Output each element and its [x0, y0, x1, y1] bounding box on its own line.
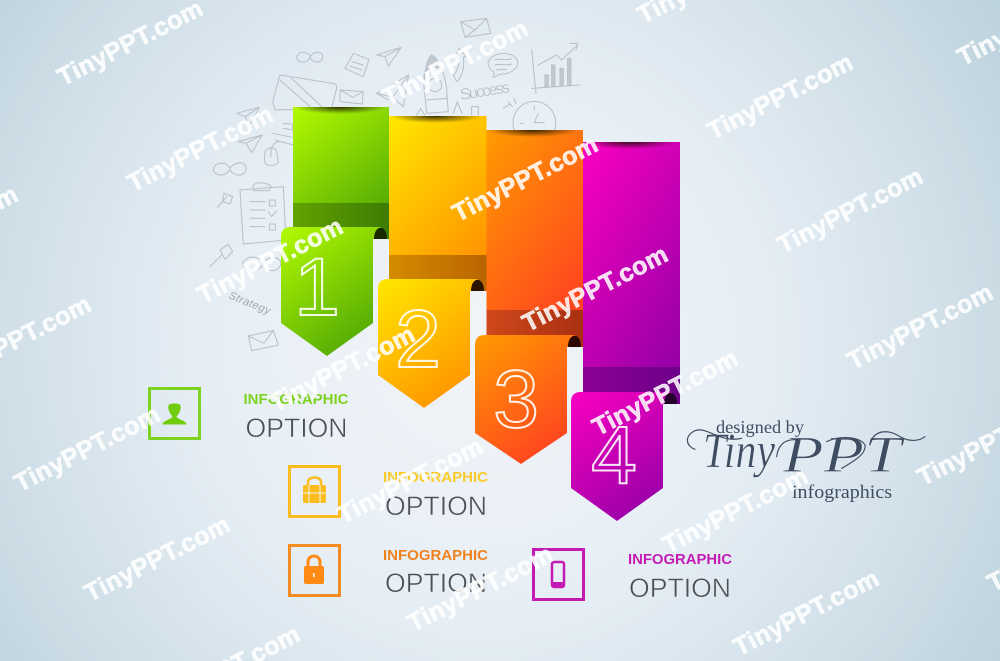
tag 4: [571, 392, 672, 521]
option 4: [534, 550, 733, 603]
option 2: INFOGRAPHIC: [383, 470, 489, 486]
icon: padlock: [290, 546, 340, 596]
logo: designed by TinyPPT: PPT: [782, 427, 905, 484]
panel: ribbon 2 yellow: 2: [395, 294, 441, 385]
option 4: OPTION: [629, 573, 731, 603]
doodle captions: [227, 79, 511, 318]
watermark: TinyPPT.com: [265, 320, 420, 418]
watermark: TinyPPT.com: [193, 212, 348, 310]
panel: ribbon 1 green: [281, 100, 389, 356]
icon: briefcase: [290, 466, 340, 516]
option 4: INFOGRAPHIC: [628, 552, 733, 568]
logo: designed by TinyPPT: Tiny: [703, 422, 776, 478]
watermark: TinyPPT.com: [403, 540, 558, 638]
icon: person: [150, 388, 200, 438]
watermark: TinyPPT.com: [10, 400, 165, 498]
tag 1: [281, 227, 381, 356]
panel: ribbon 4 magenta: 4: [591, 410, 637, 501]
doodle captions: Strategy: [227, 290, 274, 318]
watermark: TinyPPT.com: [378, 14, 533, 112]
doodle captions: Success: [459, 79, 511, 104]
option 1: [150, 388, 349, 443]
option 3: [290, 546, 489, 598]
watermark: TinyPPT.com: [518, 240, 673, 338]
watermark: TinyPPT.com: [333, 432, 488, 530]
watermark: TinyPPT.com: [729, 564, 884, 661]
option 3: INFOGRAPHIC: [383, 548, 489, 564]
watermark: TinyPPT.com: [80, 510, 235, 608]
logo: designed by TinyPPT: designed by: [716, 417, 804, 437]
watermark: TinyPPT.com: [703, 48, 858, 146]
panel: ribbon 3 orange: 3: [493, 354, 539, 445]
watermark: TinyPPT.com: [843, 278, 998, 376]
option 2: [290, 466, 489, 521]
option 1: OPTION: [246, 413, 348, 443]
option 3: OPTION: [385, 568, 487, 598]
panel: ribbon 4 magenta: [571, 135, 680, 521]
option 1: INFOGRAPHIC: [244, 392, 349, 408]
watermark: TinyPPT.com: [448, 130, 603, 228]
doodle sketches: [210, 18, 580, 351]
watermark: TinyPPT.com: [773, 162, 928, 260]
watermark: TinyPPT.com: [123, 100, 278, 198]
tag 2: [378, 279, 478, 408]
watermark: TinyPPT.com: [658, 462, 813, 560]
logo: designed by TinyPPT: infographics: [792, 482, 892, 503]
tag 3: [475, 335, 575, 464]
panel: ribbon 2 yellow: [378, 109, 486, 408]
panel: ribbon 1 green: 1: [294, 242, 340, 333]
icon: phone: [534, 550, 584, 600]
logo: designed by TinyPPT: [687, 417, 925, 503]
panel: ribbon 3 orange: [475, 123, 583, 464]
watermark: TinyPPT.com: [588, 344, 743, 442]
option 2: OPTION: [385, 491, 487, 521]
